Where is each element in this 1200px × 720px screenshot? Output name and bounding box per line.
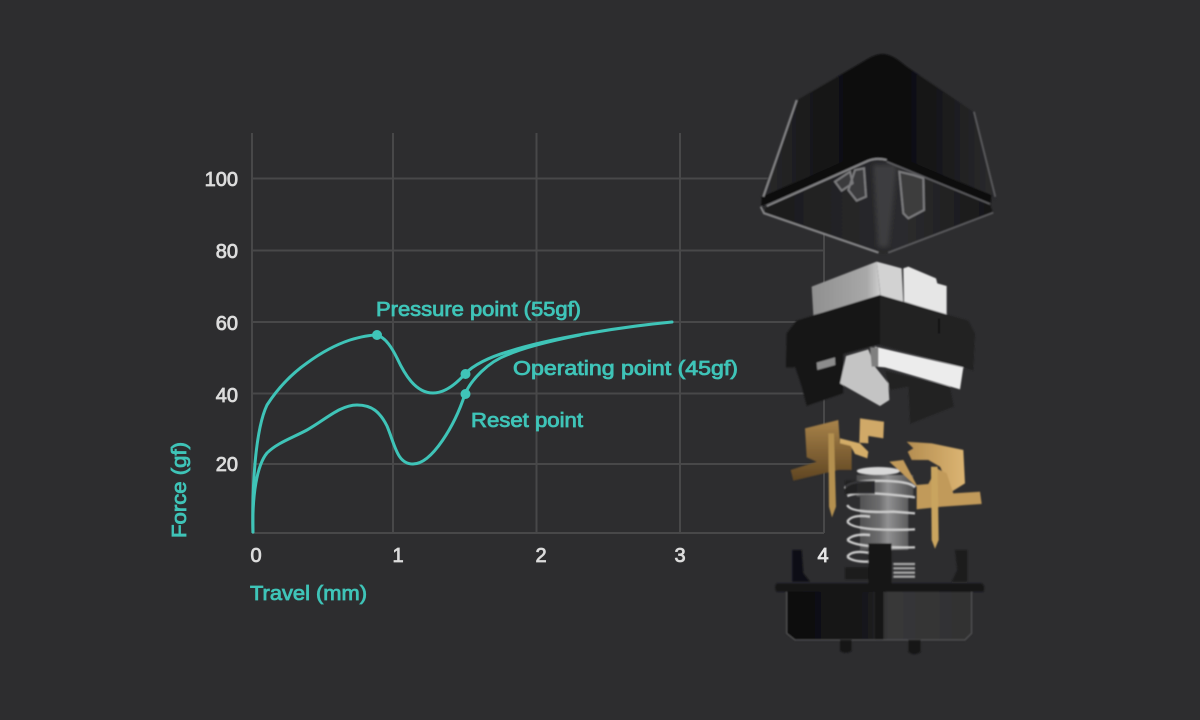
base flange	[775, 583, 984, 592]
pressure point marker	[372, 330, 382, 340]
reset point marker	[460, 389, 470, 399]
spring and cylinder	[845, 467, 915, 579]
keycap underside centre glow	[873, 165, 897, 247]
translucent stem cylinder	[857, 475, 913, 550]
base outline	[787, 592, 972, 640]
left contact tab	[840, 438, 868, 458]
operating point label: Operating point (45gf)	[513, 358, 738, 380]
base body	[787, 590, 972, 640]
lower coil stack	[893, 564, 915, 577]
right contact pin	[931, 467, 939, 549]
x axis tick labels	[250, 545, 686, 567]
x axis tick label 4: 4	[817, 545, 829, 567]
force curve: release stroke	[253, 335, 580, 532]
white plunger	[840, 349, 889, 406]
keycap highlights	[761, 100, 887, 253]
black lower left leg	[795, 350, 843, 406]
keycap stems	[835, 168, 866, 201]
upper tab	[859, 418, 884, 443]
base pegs	[840, 640, 921, 654]
cylinder cap	[857, 467, 900, 475]
spring coils	[845, 481, 915, 562]
white stem top, left face	[812, 262, 881, 315]
black lower right leg	[885, 371, 954, 424]
lower white slider	[875, 347, 963, 389]
left contact pin	[828, 433, 836, 517]
housing mark	[936, 318, 941, 333]
black housing	[786, 295, 975, 371]
y axis tick labels: 40	[216, 385, 238, 407]
chart grid	[252, 133, 824, 533]
switch illustration: housing and stem	[786, 262, 975, 424]
y axis tick labels: 80	[216, 241, 238, 263]
reset point label: Reset point	[471, 410, 583, 432]
keycap dark skirt	[761, 150, 992, 206]
housing window	[817, 357, 835, 370]
y axis tick labels: 20	[216, 454, 238, 476]
x axis tick labels: 2	[535, 545, 547, 567]
y axis title: Force (gf)	[169, 442, 191, 538]
base centre post	[868, 543, 892, 640]
right contact arm	[889, 460, 982, 509]
keycap right face	[882, 54, 996, 200]
x axis tick labels: 3	[674, 545, 686, 567]
pressure point label: Pressure point (55gf)	[376, 299, 581, 321]
dark upper coils	[845, 481, 875, 494]
x axis tick labels: 0	[250, 545, 262, 567]
switch illustration: keycap	[761, 54, 996, 254]
y axis tick labels: 60	[216, 313, 238, 335]
right contact	[889, 442, 982, 549]
y axis tick labels	[205, 169, 238, 476]
white stem top, right face	[877, 262, 903, 302]
left contact	[791, 418, 884, 517]
dark coil foot	[845, 567, 875, 579]
keycap underside	[763, 159, 993, 254]
operating point marker	[460, 369, 470, 379]
base rear posts	[792, 550, 810, 582]
keycap left face	[761, 54, 887, 197]
y axis tick labels: 100	[205, 169, 238, 191]
force curve: press stroke	[253, 322, 672, 532]
switch illustration: contacts, spring and base	[775, 418, 984, 654]
x axis tick labels: 1	[392, 545, 404, 567]
x axis title: Travel (mm)	[250, 583, 367, 605]
